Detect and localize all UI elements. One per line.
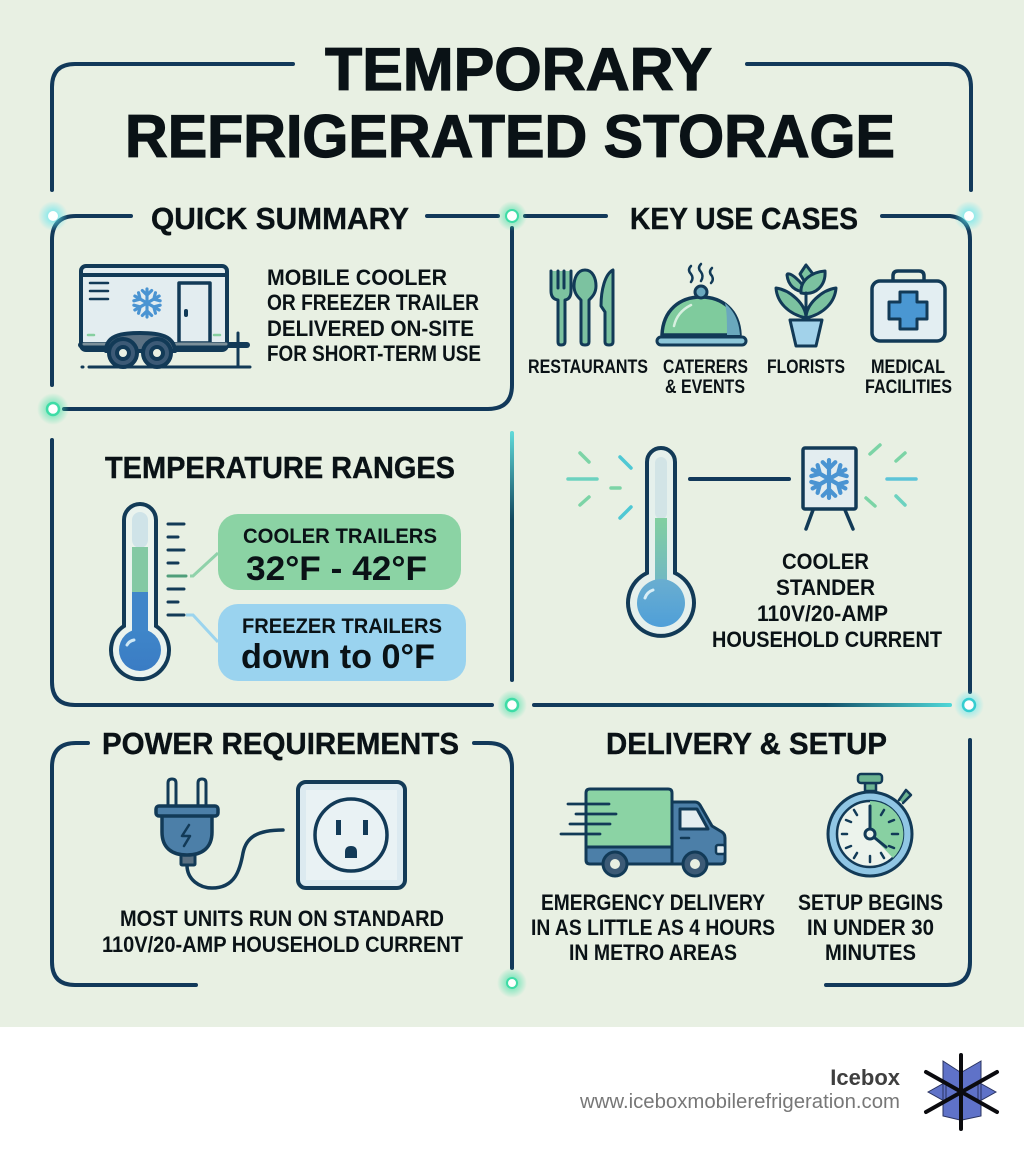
title: REFRIGERATED STORAGE (125, 103, 895, 170)
icon: refrigerated trailer (81, 266, 250, 367)
text: emergency delivery (531, 890, 775, 965)
footer brand text: www.iceboxmobilerefrigeration.com (579, 1091, 900, 1113)
thermometer ticks (168, 524, 186, 615)
footer brand text (579, 1065, 901, 1113)
text: emergency delivery: EMERGENCY DELIVERY (541, 890, 765, 915)
text: emergency delivery: IN AS LITTLE AS 4 HOURS (531, 915, 775, 940)
icon: icebox logo (926, 1055, 997, 1129)
labels: use cases: FLORISTS (767, 357, 845, 378)
text: emergency delivery: IN METRO AREAS (569, 940, 737, 965)
title: TEMPORARY (325, 36, 712, 103)
heading: power requirements: POWER REQUIREMENTS (102, 726, 459, 761)
rays left (568, 453, 631, 518)
connector: freezer (186, 615, 218, 642)
text: setup: IN UNDER 30 (807, 915, 934, 940)
callout: freezer trailers (218, 604, 466, 681)
text: cooler stander: HOUSEHOLD CURRENT (712, 627, 942, 652)
callout: cooler trailers: COOLER TRAILERS (243, 525, 437, 548)
text: summary: FOR SHORT-TERM USE (267, 341, 481, 366)
heading: key use cases: KEY USE CASES (630, 201, 858, 236)
icon: tall thermometer (628, 448, 694, 636)
text: power (102, 906, 464, 957)
text: setup (798, 890, 943, 965)
title (125, 36, 895, 170)
labels: use cases: RESTAURANTS (528, 357, 648, 378)
text: power: MOST UNITS RUN ON STANDARD (120, 906, 444, 931)
text: summary: DELIVERED ON-SITE (267, 316, 474, 341)
panel: power requirements (102, 726, 464, 957)
heading: temperature ranges: TEMPERATURE RANGES (105, 450, 455, 485)
callout: cooler trailers (218, 514, 461, 590)
text: setup: MINUTES (825, 940, 916, 965)
panel: key use cases (528, 201, 952, 398)
icon: thermometer (111, 504, 169, 679)
text: summary (267, 265, 481, 366)
frame lines (52, 64, 971, 985)
labels: use cases (528, 357, 952, 398)
icon: stopwatch (828, 774, 912, 876)
icon: delivery truck (561, 789, 725, 876)
icon: trailer snowflake (133, 289, 161, 317)
connector: cooler (190, 553, 218, 576)
footer brand text: Icebox (830, 1065, 901, 1090)
panel: cooler stander (568, 445, 942, 652)
icon: cloche (657, 264, 746, 345)
labels: use cases: & EVENTS (665, 377, 745, 398)
text: cooler stander: 110V/20-AMP (757, 601, 888, 626)
text: cooler stander: COOLER (782, 549, 869, 574)
panel: quick summary (81, 201, 481, 367)
icon: potted plant (776, 265, 836, 346)
rays right (866, 445, 916, 506)
text: summary: MOBILE COOLER (267, 265, 447, 290)
text: cooler stander: STANDER (776, 575, 875, 600)
connector line (690, 477, 789, 481)
heading: delivery and setup: DELIVERY & SETUP (606, 726, 887, 761)
icon: medical kit (872, 271, 945, 341)
callout: cooler trailers: 32°F - 42°F (246, 550, 427, 588)
labels: use cases: FACILITIES (865, 377, 952, 398)
callout: freezer trailers: down to 0°F (241, 638, 435, 676)
text: power: 110V/20-AMP HOUSEHOLD CURRENT (102, 932, 464, 957)
panel: temperature ranges (105, 450, 466, 681)
labels: use cases: CATERERS (663, 357, 748, 378)
heading: quick summary: QUICK SUMMARY (151, 201, 409, 236)
text: setup: SETUP BEGINS (798, 890, 943, 915)
footer band (0, 1027, 1024, 1154)
icon: cutlery (551, 270, 613, 345)
text: cooler stander (712, 549, 942, 652)
labels: use cases: MEDICAL (871, 357, 945, 378)
panel: delivery and setup (531, 726, 943, 965)
icon: snowflake board on stand (803, 448, 856, 529)
icon: wall outlet (298, 782, 405, 888)
text: summary: OR FREEZER TRAILER (267, 290, 479, 315)
nodes (37, 201, 984, 998)
icon: plug and cord (156, 779, 283, 888)
callout: freezer trailers: FREEZER TRAILERS (242, 615, 442, 638)
